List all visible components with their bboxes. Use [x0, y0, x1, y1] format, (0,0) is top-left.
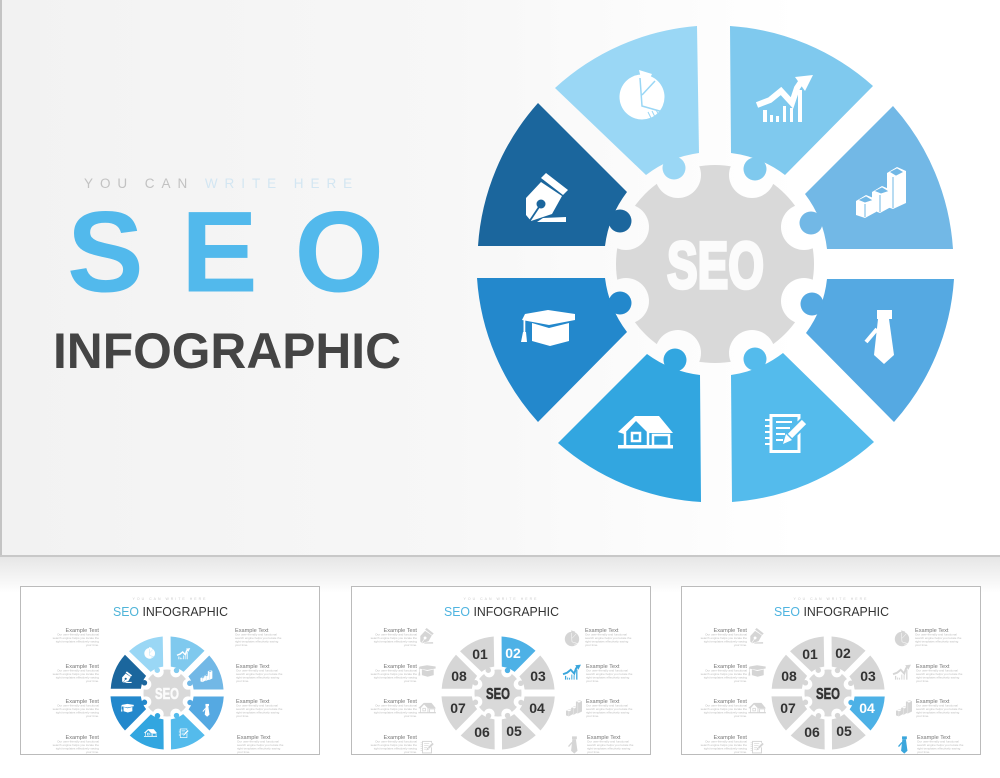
thumbnail 2 text blocks: Example Text — [384, 628, 417, 634]
thumbnail 2 icons — [418, 628, 582, 754]
thumbnail 3 numbers: 06 — [804, 724, 820, 740]
thumbnail 1 text blocks: Our user-friendly and functional — [236, 668, 278, 672]
thumbnail 3 text blocks: right templates effectively saving — [916, 710, 960, 714]
thumbnail 3 text blocks: Example Text — [714, 735, 747, 741]
thumbnail 2 text blocks: your time. — [404, 679, 417, 683]
thumbnail 2 text blocks: your time. — [585, 643, 598, 647]
thumbnail 3 text blocks: right templates effectively saving — [917, 746, 961, 750]
thumbnail 2: step 02 highlighted: SEO INFOGRAPHIC — [444, 604, 559, 619]
thumbnail 3 text blocks: search engine helps you locate the — [915, 636, 962, 640]
thumbnail 2 text blocks: Our user-friendly and functional — [375, 668, 417, 672]
thumbnail 1 text blocks: search engine helps you locate the — [236, 672, 283, 676]
thumbnail 2 numbers — [450, 645, 546, 740]
thumbnail 2 text blocks: Our user-friendly and functional — [585, 632, 627, 636]
thumbnail 1 text blocks: your time. — [86, 714, 99, 718]
thumbnail 1 text blocks: right templates effectively saving — [56, 710, 99, 714]
thumbnail 3 text blocks: search engine helps you locate the — [701, 743, 747, 747]
thumbnail 1: coloured slide: YOU CAN WRITE HERE — [133, 597, 207, 601]
thumbnail 3 text blocks: your time. — [916, 679, 929, 683]
thumbnail 3 text blocks: Example Text — [916, 664, 950, 670]
thumbnail 2 text blocks: Example Text — [587, 735, 621, 741]
thumbnail 3 text blocks: your time. — [734, 750, 747, 754]
thumbnail 3 text blocks: Our user-friendly and functional — [705, 740, 747, 744]
thumbnail 1 text blocks: Example Text — [235, 628, 269, 634]
thumbnail 3 text blocks: your time. — [915, 643, 928, 647]
thumbnail 2 numbers: 01 — [472, 646, 488, 662]
thumbnail 1 text blocks: Our user-friendly and functional — [237, 740, 279, 744]
thumbnail 1 text blocks: Example Text — [236, 664, 270, 670]
thumbnail 3 numbers: 03 — [860, 668, 876, 684]
thumbnail 3 text blocks: right templates effectively saving — [704, 640, 747, 644]
segment 6: house — [558, 348, 701, 502]
thumbnail 1 text blocks: your time. — [237, 750, 250, 754]
thumbnail 3 text blocks: Example Text — [915, 628, 949, 634]
thumbnail 1 text blocks: right templates effectively saving — [237, 746, 281, 750]
thumbnail 1 text blocks: Example Text — [66, 628, 99, 634]
thumbnail 3 text blocks: your time. — [734, 714, 747, 718]
thumbnail 1 text blocks: right templates effectively saving — [56, 746, 99, 750]
thumbnail 3 text blocks: Our user-friendly and functional — [916, 668, 958, 672]
thumbnail 3 text blocks: search engine helps you locate the — [917, 743, 964, 747]
thumbnail 2 numbers: 07 — [450, 700, 466, 716]
panel: main slide — [0, 0, 1000, 593]
thumbnail 3 text blocks: Example Text — [714, 628, 747, 634]
segment 8: fountain pen — [478, 103, 632, 246]
thumbnail 3 text blocks: Our user-friendly and functional — [916, 704, 958, 708]
thumbnail 3 text blocks: search engine helps you locate the — [701, 707, 747, 711]
thumbnail 3 text blocks: right templates effectively saving — [915, 640, 959, 644]
thumbnail 2 text blocks: right templates effectively saving — [374, 746, 417, 750]
thumbnail 1 text blocks: Our user-friendly and functional — [57, 704, 99, 708]
thumbnail 2 text blocks: right templates effectively saving — [586, 710, 630, 714]
segment 1: pie chart — [555, 26, 699, 180]
thumbnail 2 text blocks: right templates effectively saving — [374, 676, 417, 680]
thumbnail 2 text blocks: search engine helps you locate the — [585, 636, 632, 640]
thumbnail 3 text blocks: Example Text — [916, 699, 950, 705]
thumbnail 2 text blocks: your time. — [404, 643, 417, 647]
segment 7: graduation cap — [477, 278, 632, 422]
thumbnail 1 text blocks: your time. — [236, 714, 249, 718]
thumbnail 2 text blocks: right templates effectively saving — [587, 746, 631, 750]
thumbnail 3 text blocks — [701, 628, 964, 754]
thumbnail 3 numbers: 02 — [835, 645, 851, 661]
thumbnail 2 text blocks: Our user-friendly and functional — [587, 740, 629, 744]
thumbnail 1 text blocks: Our user-friendly and functional — [57, 668, 99, 672]
thumbnail 3 text blocks: search engine helps you locate the — [916, 672, 963, 676]
thumbnail 1: coloured slide: SEO — [155, 686, 179, 703]
thumbnail 3 text blocks: search engine helps you locate the — [701, 672, 747, 676]
thumbnail 1 text blocks: your time. — [86, 750, 99, 754]
thumbnail 2 text blocks: search engine helps you locate the — [587, 743, 634, 747]
thumbnail 2 text blocks — [371, 628, 634, 754]
thumbnail 3: step 04 highlighted: YOU CAN WRITE HERE — [794, 597, 868, 601]
gear hub — [616, 165, 814, 363]
thumbnail 3 text blocks: Our user-friendly and functional — [915, 632, 957, 636]
thumbnail 3 wheel — [771, 636, 885, 750]
thumbnail 1 text blocks: your time. — [235, 643, 248, 647]
thumbnail 3 numbers: 08 — [781, 668, 797, 684]
thumbnail 3 numbers — [780, 645, 876, 740]
thumbnail 3 numbers: 04 — [859, 700, 875, 716]
thumbnail 1 text blocks: Our user-friendly and functional — [57, 740, 99, 744]
thumbnail 1 text blocks: right templates effectively saving — [236, 710, 280, 714]
thumbnail 2 numbers: 08 — [451, 668, 467, 684]
thumbnail 3 numbers: 05 — [836, 723, 852, 739]
thumbnail 2 text blocks: right templates effectively saving — [374, 710, 417, 714]
thumbnail 2 text blocks: search engine helps you locate the — [371, 707, 417, 711]
thumbnail 3 text blocks: Our user-friendly and functional — [705, 668, 747, 672]
thumbnail 1 text blocks: search engine helps you locate the — [237, 743, 284, 747]
heading: SEO: SEO — [67, 188, 384, 316]
thumbnail 2: step 02 highlighted: SEO — [486, 686, 510, 703]
thumbnail 2 text blocks: your time. — [586, 679, 599, 683]
thumbnail 3 text blocks: Our user-friendly and functional — [705, 632, 747, 636]
segment 3: 3D bars — [800, 106, 953, 249]
thumbnail 3 text blocks: Example Text — [714, 699, 747, 705]
thumbnail 3 text blocks: your time. — [917, 750, 930, 754]
thumbnail 2 numbers: 04 — [529, 700, 545, 716]
thumbnail 3 text blocks: Example Text — [917, 735, 951, 741]
thumbnail 2 numbers: 03 — [530, 668, 546, 684]
thumbnail 2 text blocks: Our user-friendly and functional — [586, 704, 628, 708]
thumbnail 1 text blocks: search engine helps you locate the — [53, 636, 99, 640]
thumbnail 3 text blocks: right templates effectively saving — [704, 710, 747, 714]
thumbnail 3 text blocks: right templates effectively saving — [704, 676, 747, 680]
thumbnail 1 text blocks: Our user-friendly and functional — [235, 632, 277, 636]
thumbnail 1 text blocks: Example Text — [236, 699, 270, 705]
thumbnail 2 numbers: 02 — [505, 645, 521, 661]
thumbnail 3 numbers: 07 — [780, 700, 796, 716]
thumbnail 2 text blocks: search engine helps you locate the — [586, 707, 633, 711]
thumbnail 3 text blocks: Our user-friendly and functional — [917, 740, 959, 744]
thumbnail 2 numbers: 06 — [474, 724, 490, 740]
thumbnail 1 text blocks: Example Text — [237, 735, 271, 741]
thumbnail 1 text blocks: search engine helps you locate the — [53, 707, 99, 711]
thumbnail 3 text blocks: your time. — [734, 679, 747, 683]
thumbnail 1 text blocks: search engine helps you locate the — [236, 707, 283, 711]
thumbnail 1: coloured slide: SEO INFOGRAPHIC — [113, 604, 228, 619]
thumbnail 2 text blocks: Our user-friendly and functional — [375, 740, 417, 744]
thumbnail 1 text blocks: right templates effectively saving — [56, 676, 99, 680]
thumbnail 2 text blocks: right templates effectively saving — [586, 676, 630, 680]
thumbnail 1 text blocks: your time. — [236, 679, 249, 683]
thumbnail 3 text blocks: search engine helps you locate the — [701, 636, 747, 640]
tagline: YOU CAN WRITE HERE — [84, 176, 359, 191]
thumbnail 2 text blocks: Our user-friendly and functional — [375, 632, 417, 636]
thumbnail 2 text blocks: search engine helps you locate the — [371, 672, 417, 676]
thumbnail 3: step 04 highlighted — [682, 586, 980, 754]
thumbnail 1 text blocks: right templates effectively saving — [236, 676, 280, 680]
thumbnail 2 text blocks: search engine helps you locate the — [586, 672, 633, 676]
thumbnail 3 text blocks: Our user-friendly and functional — [705, 704, 747, 708]
thumbnail 3 icons — [748, 628, 912, 754]
thumbnail 3 text blocks: your time. — [916, 714, 929, 718]
heading: INFOGRAPHIC: INFOGRAPHIC — [53, 323, 401, 379]
thumbnail 2 text blocks: your time. — [404, 714, 417, 718]
thumbnail 3 text blocks: Example Text — [714, 664, 747, 670]
thumbnail 2 text blocks: right templates effectively saving — [585, 640, 629, 644]
segment 2: growth chart — [730, 26, 873, 180]
thumbnail 1 text blocks: search engine helps you locate the — [235, 636, 282, 640]
thumbnail 3 text blocks: search engine helps you locate the — [916, 707, 963, 711]
thumbnail 2: step 02 highlighted — [352, 586, 650, 754]
segment 5: notebook — [731, 348, 874, 502]
thumbnail 1 wheel — [110, 636, 224, 750]
thumbnail 3: step 04 highlighted: SEO — [816, 686, 840, 703]
thumbnail 1 text blocks: Example Text — [66, 735, 99, 741]
thumbnail 3 text blocks: your time. — [734, 643, 747, 647]
thumbnail 2 text blocks: Example Text — [384, 699, 417, 705]
thumbnail 2 wheel — [441, 636, 555, 750]
gear hub: SEO — [667, 228, 764, 302]
thumbnail 1 text blocks: search engine helps you locate the — [53, 672, 99, 676]
thumbnail 2 text blocks: Example Text — [585, 628, 619, 634]
thumbnail 1: coloured slide — [20, 586, 320, 754]
thumbnail 1 text blocks: right templates effectively saving — [235, 640, 279, 644]
thumbnail 2: step 02 highlighted: YOU CAN WRITE HERE — [464, 597, 538, 601]
thumbnail 2 text blocks: Example Text — [384, 664, 417, 670]
thumbnail 1 text blocks: right templates effectively saving — [56, 640, 99, 644]
thumbnail 3 numbers: 01 — [802, 646, 818, 662]
thumbnail 1 text blocks: your time. — [86, 643, 99, 647]
thumbnail 1 text blocks: Our user-friendly and functional — [57, 632, 99, 636]
thumbnail 1 text blocks: Our user-friendly and functional — [236, 704, 278, 708]
thumbnail 2 text blocks: Example Text — [586, 699, 620, 705]
thumbnail 2 text blocks: Our user-friendly and functional — [375, 704, 417, 708]
thumbnail 2 text blocks: search engine helps you locate the — [371, 743, 417, 747]
segment 4: tie — [800, 279, 954, 422]
thumbnail 1 text blocks: search engine helps you locate the — [53, 743, 99, 747]
thumbnail 2 numbers: 05 — [506, 723, 522, 739]
thumbnail 2 text blocks: Example Text — [384, 735, 417, 741]
thumbnail 2 text blocks: Our user-friendly and functional — [586, 668, 628, 672]
thumbnail 1 text blocks: your time. — [86, 679, 99, 683]
thumbnail 2 text blocks: Example Text — [586, 664, 620, 670]
thumbnail 2 text blocks: your time. — [587, 750, 600, 754]
thumbnail 2 text blocks: right templates effectively saving — [374, 640, 417, 644]
thumbnail 2 text blocks: your time. — [404, 750, 417, 754]
thumbnail 1 text blocks — [53, 628, 284, 754]
thumbnail 3 text blocks: right templates effectively saving — [704, 746, 747, 750]
thumbnail 1 text blocks: Example Text — [66, 664, 99, 670]
thumbnail 2 text blocks: your time. — [586, 714, 599, 718]
thumbnail 3: step 04 highlighted: SEO INFOGRAPHIC — [774, 604, 889, 619]
thumbnail 1 text blocks: Example Text — [66, 699, 99, 705]
thumbnail 2 text blocks: search engine helps you locate the — [371, 636, 417, 640]
chart: SEO puzzle wheel — [477, 26, 954, 502]
thumbnail 3 text blocks: right templates effectively saving — [916, 676, 960, 680]
